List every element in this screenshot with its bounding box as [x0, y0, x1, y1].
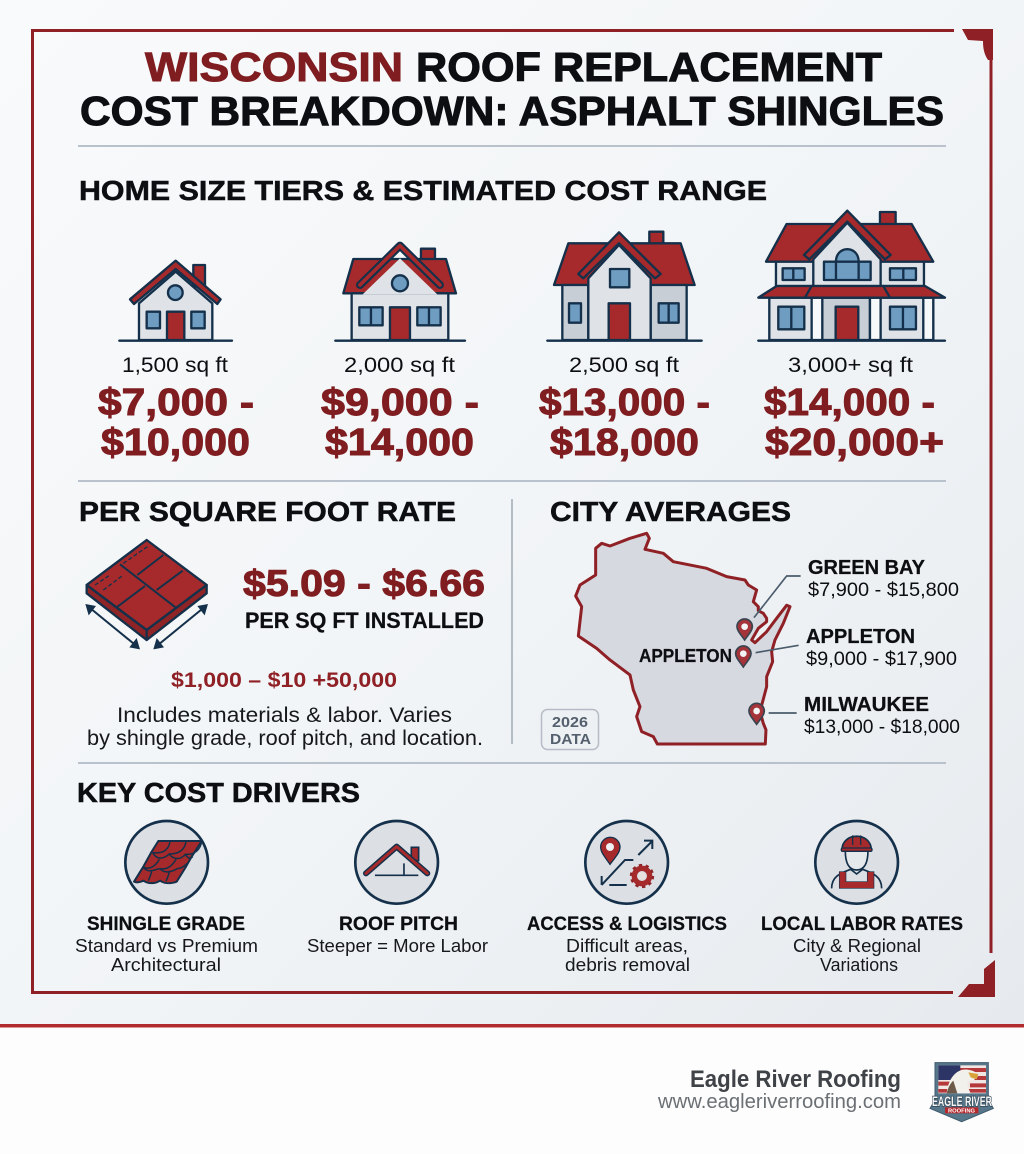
- driver: access and logistics: debris removal: [565, 954, 690, 975]
- decorative frame: [32, 29, 995, 997]
- driver: shingle grade: SHINGLE GRADE: [87, 914, 245, 935]
- driver: shingle grade: [75, 914, 258, 975]
- tier 1: 1,500 sq ft: $7,000 -: [98, 382, 254, 424]
- title: [80, 44, 944, 134]
- tier 1: 1,500 sq ft: [98, 354, 254, 464]
- title: WISCONSIN: [145, 44, 403, 90]
- secondary red figure: $1,000 – $10 +50,000: [171, 669, 397, 692]
- tier 4: 3,000+ sq ft: [764, 354, 944, 464]
- tier 4: 3,000+ sq ft: $14,000 -: [764, 382, 935, 424]
- driver: roof pitch: ROOF PITCH: [339, 914, 458, 935]
- driver: local labor rates: Variations: [820, 954, 898, 975]
- map label: Appleton: APPLETON: [639, 646, 732, 666]
- heading: home size tiers: HOME SIZE TIERS & ESTIMATED COST RANGE: [79, 175, 767, 206]
- driver: access and logistics: [527, 914, 727, 975]
- badge: 2026 data: [542, 710, 598, 750]
- icon: medium house: [335, 246, 465, 341]
- heading: per square foot rate: PER SQUARE FOOT RATE: [79, 496, 456, 527]
- tier 1: 1,500 sq ft: 1,500 sq ft: [122, 354, 228, 377]
- driver: access and logistics: Difficult areas,: [566, 935, 688, 956]
- badge: 2026 data: 2026: [552, 714, 588, 731]
- city: Green Bay: [808, 557, 959, 601]
- city: Appleton: APPLETON: [806, 626, 915, 648]
- tier 1: 1,500 sq ft: $10,000: [101, 422, 250, 464]
- per square foot price: [243, 563, 485, 633]
- per square foot price: PER SQ FT INSTALLED: [245, 608, 484, 633]
- icon: extra large house: [758, 211, 945, 341]
- tier 3: 2,500 sq ft: [539, 354, 710, 464]
- tier 3: 2,500 sq ft: $13,000 -: [539, 382, 710, 424]
- icon: small house: [119, 261, 232, 341]
- driver: shingle grade: Architectural: [111, 954, 221, 975]
- map: Wisconsin with city pins: [576, 533, 801, 744]
- title: COST BREAKDOWN: ASPHALT SHINGLES: [80, 88, 944, 134]
- heading: key cost drivers: KEY COST DRIVERS: [77, 777, 360, 808]
- tier 4: 3,000+ sq ft: $20,000+: [765, 422, 944, 464]
- city: Appleton: [806, 626, 957, 670]
- logo: Eagle River Roofing badge: ROOFING: [948, 1108, 975, 1114]
- per square foot note: [87, 704, 483, 750]
- icon: local labor rates: [815, 821, 898, 904]
- tier 4: 3,000+ sq ft: 3,000+ sq ft: [788, 354, 913, 377]
- per square foot note: by shingle grade, roof pitch, and location.: [87, 727, 483, 750]
- icon: shingle grade: [125, 821, 208, 904]
- logo: Eagle River Roofing badge: [930, 1063, 993, 1122]
- icon: roof pitch: [355, 821, 438, 904]
- driver: local labor rates: City & Regional: [793, 935, 921, 956]
- driver: shingle grade: Standard vs Premium: [75, 935, 258, 956]
- tier 2: 2,000 sq ft: $9,000 -: [321, 382, 479, 424]
- tier 2: 2,000 sq ft: [321, 354, 479, 464]
- tier 3: 2,500 sq ft: $18,000: [550, 422, 699, 464]
- badge: 2026 data: DATA: [550, 731, 591, 748]
- driver: access and logistics: ACCESS & LOGISTICS: [527, 914, 727, 935]
- footer: company name and website: [657, 1066, 901, 1113]
- icon: access and logistics: [585, 821, 668, 904]
- city: Milwaukee: $13,000 - $18,000: [804, 717, 960, 738]
- tier 3: 2,500 sq ft: 2,500 sq ft: [569, 354, 679, 377]
- icon: shingle sample with dimension arrows: [85, 540, 208, 649]
- driver: local labor rates: LOCAL LABOR RATES: [761, 914, 963, 935]
- driver: roof pitch: Steeper = More Labor: [307, 935, 488, 956]
- tier 2: 2,000 sq ft: 2,000 sq ft: [344, 354, 455, 377]
- driver: roof pitch: [307, 914, 488, 956]
- footer: company name and website: www.eagleriverroofing.com: [657, 1091, 901, 1113]
- city: Green Bay: GREEN BAY: [808, 557, 926, 579]
- per square foot note: Includes materials & labor. Varies: [117, 704, 452, 727]
- city: Green Bay: $7,900 - $15,800: [808, 580, 959, 601]
- city: Milwaukee: [804, 694, 960, 738]
- heading: city averages: CITY AVERAGES: [550, 496, 791, 527]
- icon: large house: [547, 232, 702, 341]
- title: ROOF REPLACEMENT: [416, 44, 882, 90]
- city: Milwaukee: MILWAUKEE: [804, 694, 929, 716]
- per square foot price: $5.09 - $6.66: [243, 563, 485, 604]
- tier 2: 2,000 sq ft: $14,000: [325, 422, 474, 464]
- driver: local labor rates: [761, 914, 963, 975]
- city: Appleton: $9,000 - $17,900: [806, 649, 957, 670]
- footer: company name and website: Eagle River Roofing: [690, 1066, 901, 1093]
